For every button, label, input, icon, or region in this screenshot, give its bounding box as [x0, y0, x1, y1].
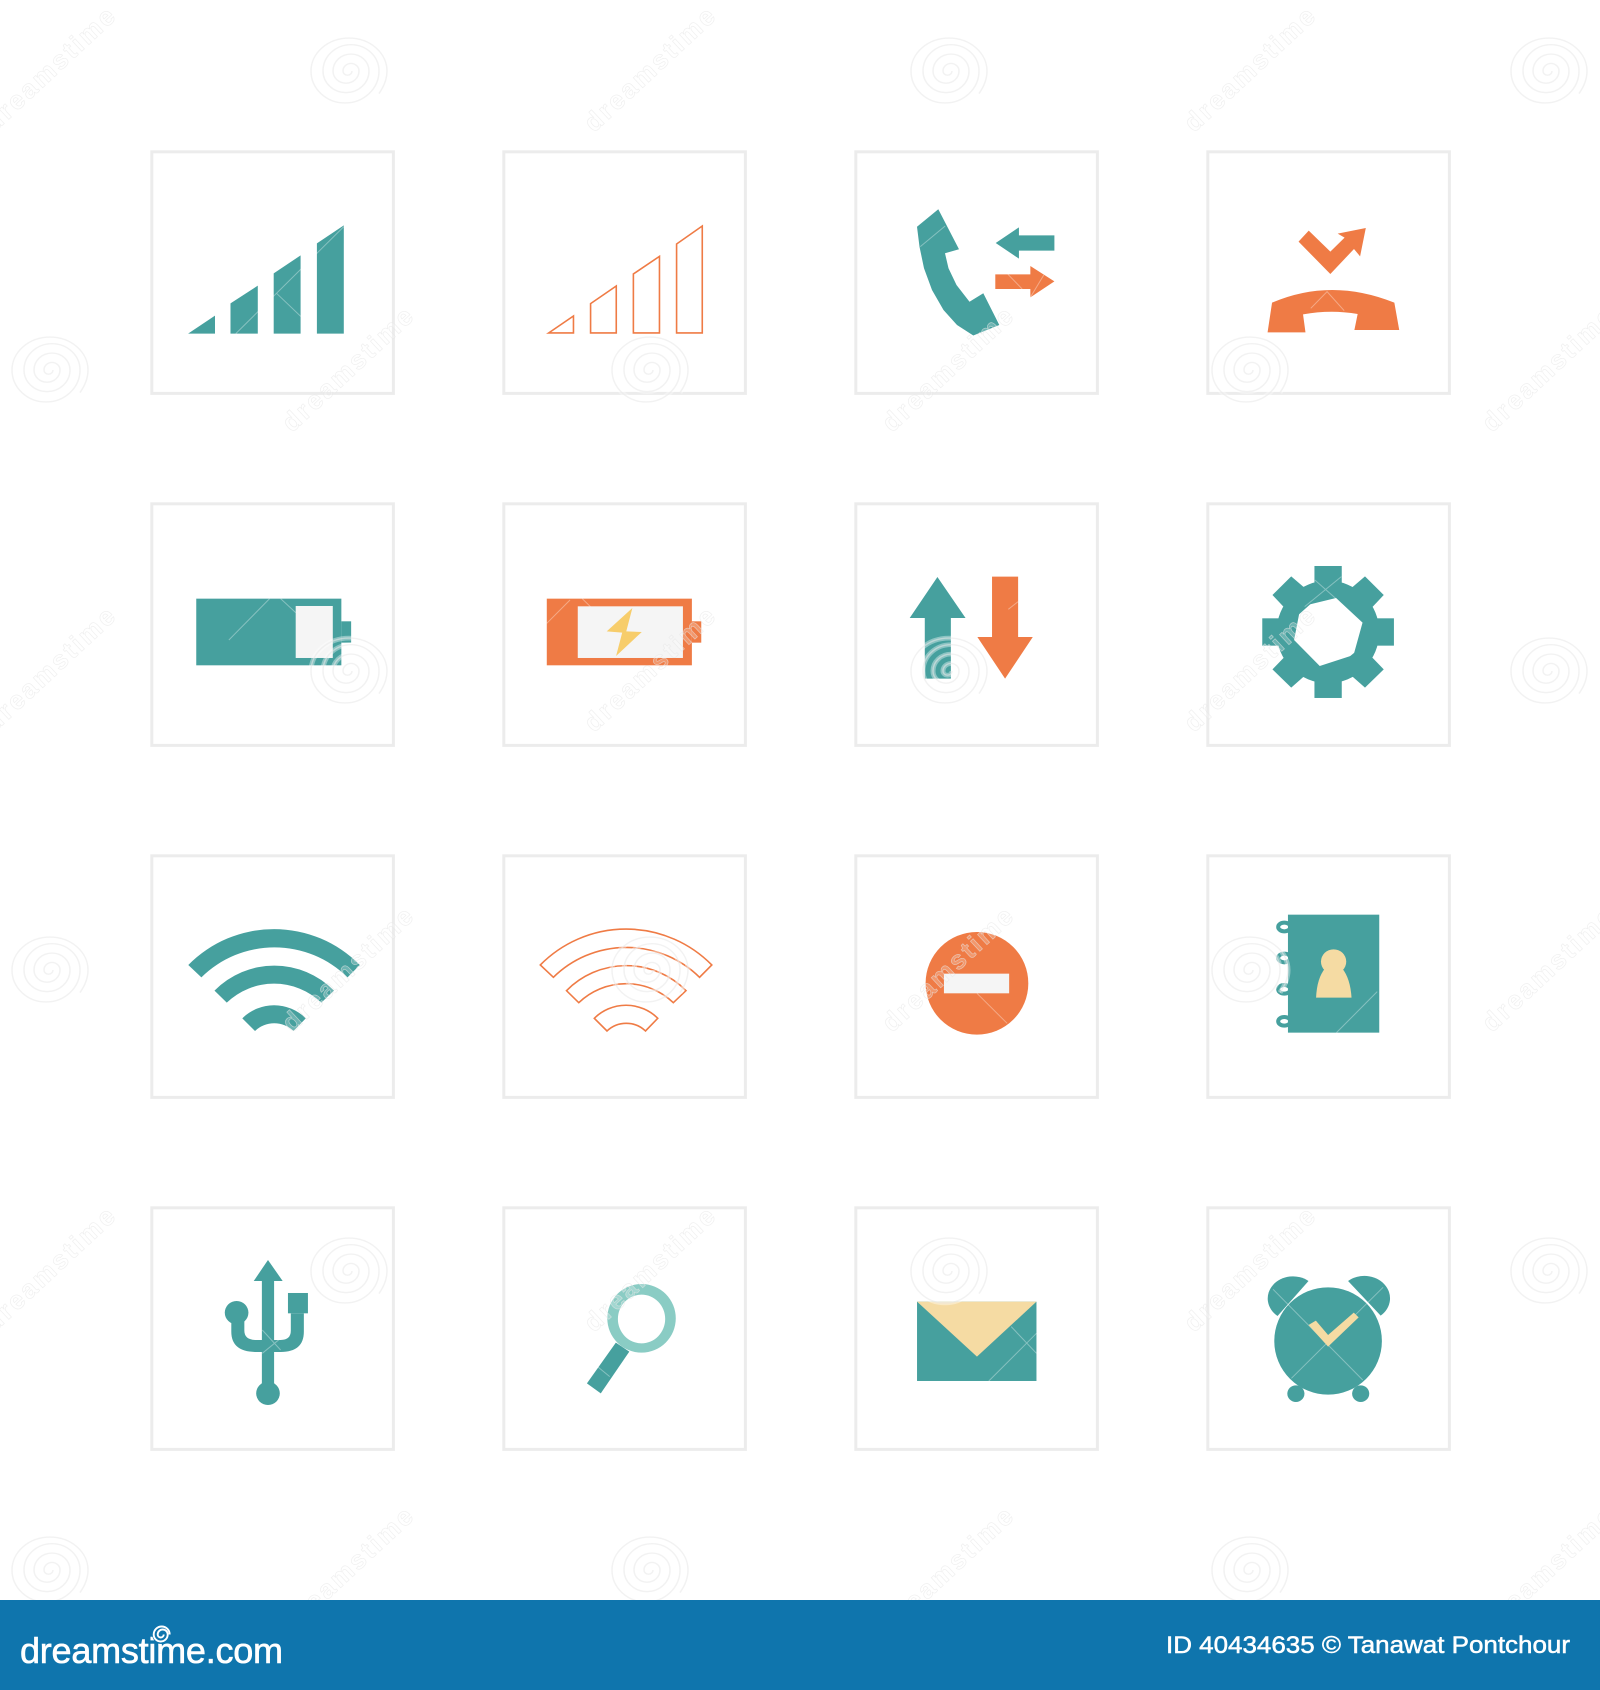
icon: up and down arrows — [910, 577, 1033, 679]
panel frame — [504, 152, 745, 393]
watermark text: dreamstime — [276, 301, 419, 438]
panel: wifi outline — [504, 856, 745, 1097]
icon: teal battery — [196, 599, 351, 665]
panel frame — [856, 1208, 1097, 1449]
panel: mail — [856, 1208, 1097, 1449]
icon: address book — [1278, 915, 1379, 1033]
watermark text: dreamstime — [578, 1, 721, 138]
watermark text: dreamstime — [1178, 1, 1321, 138]
icon: teal wifi arcs — [188, 929, 360, 1031]
icon: alarm clock — [1268, 1276, 1390, 1402]
panel: wifi filled — [152, 856, 393, 1097]
panel frame — [504, 504, 745, 745]
icon: envelope — [917, 1302, 1036, 1381]
footer background — [0, 1600, 1600, 1690]
panel: search — [504, 1208, 745, 1449]
icon: orange charging battery — [547, 599, 701, 665]
icon: orange outline wifi arcs — [540, 929, 712, 1031]
handset — [917, 209, 999, 336]
panel: settings — [1208, 504, 1449, 745]
watermark text: dreamstime — [1178, 601, 1321, 738]
panel: missed call — [1208, 152, 1449, 393]
panel: usb — [152, 1208, 393, 1449]
panel frame — [504, 856, 745, 1097]
icon: hung-up handset with bounce arrow — [1268, 228, 1399, 332]
panel: contacts — [1208, 856, 1449, 1097]
panel frame — [152, 1208, 393, 1449]
panel frame — [1208, 504, 1449, 745]
icon: orange outline signal bars — [549, 226, 702, 333]
watermark text: dreamstime — [876, 301, 1019, 438]
panel frame — [152, 856, 393, 1097]
panel frame — [856, 152, 1097, 393]
panel frame — [856, 504, 1097, 745]
panel: do not disturb — [856, 856, 1097, 1097]
panel: alarm — [1208, 1208, 1449, 1449]
icon: teal signal bars — [188, 225, 344, 334]
panel frame — [504, 1208, 745, 1449]
panel frame — [1208, 856, 1449, 1097]
panel frame — [152, 152, 393, 393]
panel: battery charging — [504, 504, 745, 745]
icon: handset with two arrows — [917, 209, 1054, 336]
icon: gear — [1262, 566, 1394, 698]
icon: magnifying glass — [587, 1284, 676, 1393]
panel: signal bars outline — [504, 152, 745, 393]
icon: usb trident — [225, 1260, 308, 1405]
panel frame — [1208, 1208, 1449, 1449]
panel: phone call transfer — [856, 152, 1097, 393]
panel: battery low — [152, 504, 393, 745]
icon: logo spiral — [152, 1625, 171, 1644]
watermark text: dreamstime — [578, 1201, 721, 1338]
arrows — [920, 226, 1054, 297]
panel frame — [1208, 152, 1449, 393]
icon: no-entry sign — [926, 932, 1028, 1035]
panel frame — [856, 856, 1097, 1097]
watermark text: dreamstime — [276, 901, 419, 1038]
footer logo text: dreamstime.com — [20, 1630, 283, 1671]
watermark text: dreamstime — [876, 901, 1019, 1038]
panel: data transfer — [856, 504, 1097, 745]
panel: signal bars filled — [152, 152, 393, 393]
watermark text: dreamstime — [1178, 1201, 1321, 1338]
image credit: ID 40434635 © Tanawat Pontchour — [1166, 1632, 1570, 1659]
watermark text: dreamstime — [876, 1501, 1019, 1638]
watermark text: dreamstime — [578, 601, 721, 738]
panel frame — [152, 504, 393, 745]
watermark text: dreamstime — [276, 1501, 419, 1638]
footer bar — [0, 1600, 1600, 1690]
